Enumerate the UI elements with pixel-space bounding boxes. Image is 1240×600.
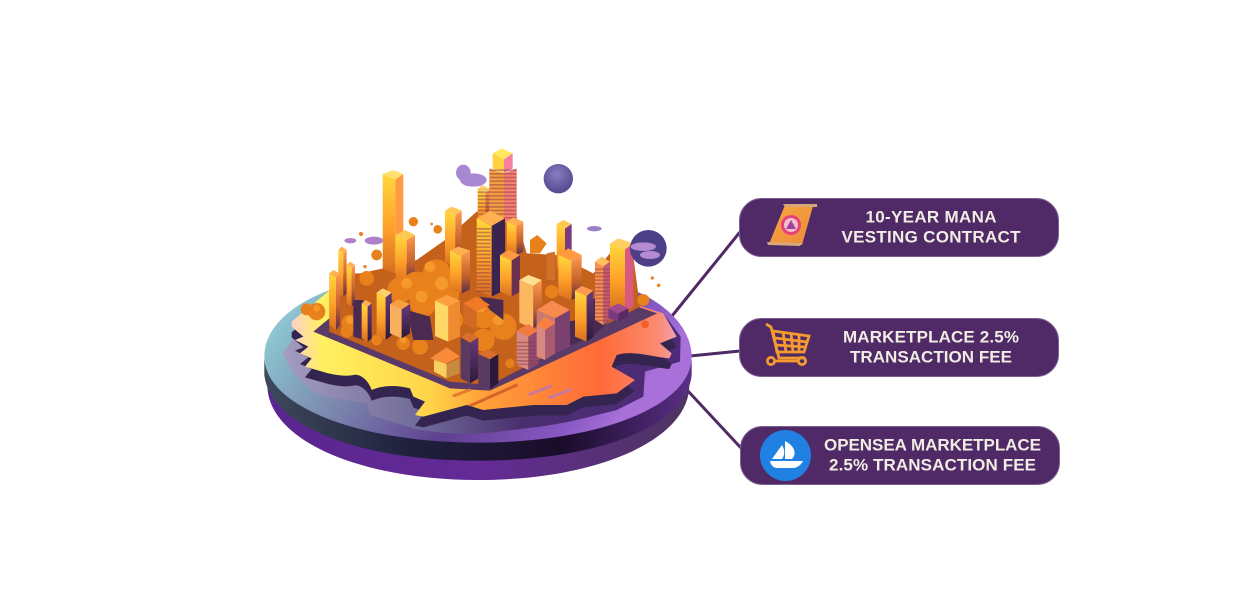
label: 10-year MANA vesting contract: 10-YEAR MANA <box>866 208 996 226</box>
back buildings <box>338 148 633 312</box>
city base <box>313 267 657 391</box>
city backdrop mass <box>329 212 640 385</box>
tree canopy <box>301 217 660 368</box>
label: 10-year MANA vesting contract: VESTING CONTRACT <box>842 228 1021 246</box>
lower land layer <box>283 313 681 434</box>
panel: marketplace fee <box>740 318 1058 376</box>
label: marketplace transaction fee: MARKETPLACE 2.5% <box>843 328 1019 346</box>
tree canopy highlights <box>313 261 504 343</box>
road <box>452 383 572 407</box>
panel: OpenSea fee <box>740 426 1060 484</box>
label: OpenSea marketplace transaction fee: 2.5% TRANSACTION FEE <box>829 456 1036 474</box>
isometric city on disc illustration <box>264 148 692 480</box>
label: marketplace transaction fee: TRANSACTION FEE <box>850 348 1012 366</box>
floating clouds and planets <box>344 164 667 267</box>
connector lines <box>672 232 741 448</box>
label: OpenSea marketplace transaction fee: OPENSEA MARKETPLACE <box>824 436 1041 454</box>
icon: OpenSea ship <box>760 430 811 481</box>
land extrusion shadow <box>292 261 677 427</box>
middle buildings <box>329 211 628 342</box>
dark gaps between buildings <box>353 297 610 353</box>
front buildings <box>430 295 570 389</box>
icon: scroll with MANA coin <box>767 204 817 246</box>
yellow-orange land surface <box>292 250 677 417</box>
disc layers <box>264 273 692 480</box>
icon: shopping cart <box>766 324 809 365</box>
panel: vesting contract <box>740 198 1058 256</box>
